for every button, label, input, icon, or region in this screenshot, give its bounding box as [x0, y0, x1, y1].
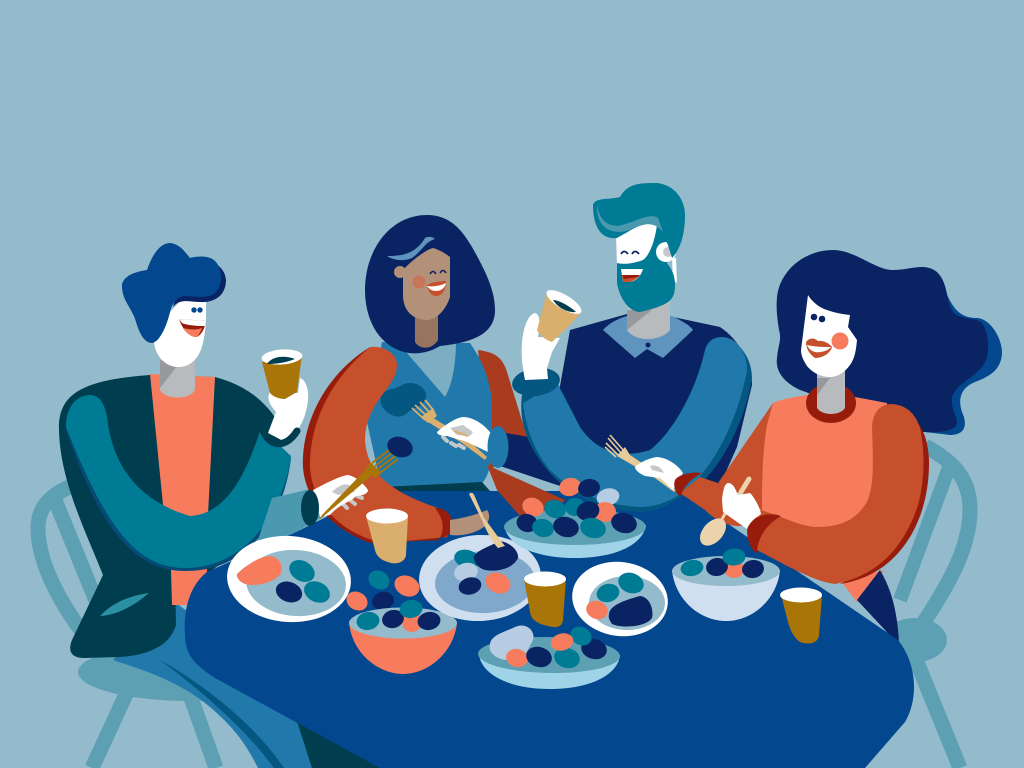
arm edge	[840, 408, 929, 584]
mouth	[179, 319, 206, 337]
neck	[627, 300, 670, 339]
loose food on table	[343, 567, 455, 614]
hair	[593, 183, 685, 258]
table	[185, 491, 914, 768]
plate: right white	[567, 556, 673, 642]
sleeve	[66, 395, 291, 568]
man centre-right: arm	[510, 337, 752, 512]
cup: tan	[366, 508, 408, 563]
forearm	[680, 477, 748, 526]
man on left: rear forearm	[258, 488, 322, 540]
plate: left white	[224, 532, 354, 626]
neck	[817, 365, 845, 414]
gray fingers	[443, 437, 464, 448]
eyes	[430, 270, 446, 274]
dish: top centre	[504, 475, 646, 558]
cheek	[832, 332, 848, 350]
hair	[122, 243, 221, 343]
cuff	[301, 490, 319, 526]
eyes	[621, 252, 639, 254]
hair shadow	[173, 257, 226, 307]
knee highlight	[100, 593, 149, 616]
woman far right: hair	[777, 250, 1002, 435]
woman far right: spoon and hand	[695, 479, 761, 551]
sweater front	[745, 395, 895, 545]
mouth	[427, 281, 446, 296]
arm	[757, 404, 924, 584]
cup: gold centre	[524, 572, 566, 627]
woman far right: torso	[674, 365, 929, 584]
right chair	[883, 446, 970, 768]
cheek	[412, 276, 426, 288]
face	[616, 220, 660, 266]
hand	[450, 510, 489, 535]
woman centre-left: vest and far arm	[367, 340, 528, 493]
face	[154, 298, 206, 367]
man on left: legs	[113, 600, 385, 768]
cup	[537, 292, 581, 342]
mouth	[806, 338, 832, 358]
hair lock	[387, 237, 435, 260]
shirt	[150, 374, 215, 605]
centre plate	[417, 493, 543, 624]
ear	[156, 302, 170, 316]
left chair	[38, 478, 302, 768]
cuff	[263, 430, 297, 444]
woman far right: face	[801, 295, 857, 377]
woman far right: lower shirt and legs	[840, 570, 899, 645]
ear	[656, 242, 676, 262]
cup: gold right	[780, 588, 822, 644]
hand holding cup: man centre-right	[522, 286, 585, 380]
hair highlight	[597, 205, 663, 232]
mouth	[621, 269, 643, 282]
coral bowl	[349, 598, 457, 674]
food blob on fork	[380, 383, 426, 417]
beard	[617, 225, 682, 312]
cuff	[747, 514, 781, 553]
man on left: torso and jacket	[59, 355, 291, 658]
woman centre-left: face and neck	[387, 237, 450, 348]
man centre-right: head	[593, 183, 685, 339]
gray fingers	[343, 496, 362, 508]
man centre-right: hand with fork	[605, 435, 683, 492]
man on left: head	[122, 243, 226, 367]
woman centre-left: far forearm	[487, 465, 565, 525]
woman centre-left: hand with fork and blue cuff	[412, 400, 508, 468]
eyes	[191, 307, 197, 313]
sleeve shadow	[66, 398, 291, 571]
man on left: hand with fork	[301, 433, 416, 526]
man centre-right: forearm	[500, 432, 572, 490]
woman centre-left: near arm	[303, 347, 489, 543]
eyes	[811, 314, 817, 320]
spoon	[469, 493, 505, 548]
man centre-right: sweater and collar	[545, 314, 752, 500]
dish: bottom centre	[478, 623, 620, 689]
sweater left shade	[718, 403, 773, 510]
fork	[412, 400, 434, 420]
cuff	[510, 365, 562, 399]
bowl: right pale blue	[672, 548, 780, 621]
woman centre-left: hair	[365, 215, 495, 353]
fork	[319, 466, 375, 520]
man on left: raised hand with gold cup	[261, 348, 308, 444]
neck	[160, 355, 195, 398]
